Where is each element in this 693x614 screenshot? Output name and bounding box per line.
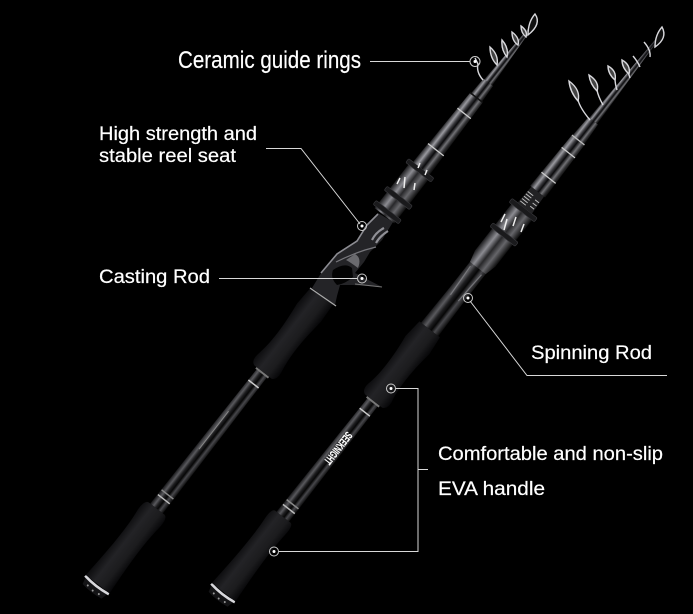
callout: reel seat: High strength and bbox=[99, 124, 257, 145]
callout: spinning rod: Spinning Rod bbox=[531, 343, 652, 364]
upper blank sections bbox=[413, 144, 444, 175]
spinning rod bbox=[205, 24, 674, 610]
fore EVA grip bbox=[362, 320, 442, 410]
butt cap bbox=[80, 576, 109, 601]
callout: ceramic guide rings: Ceramic guide rings bbox=[178, 47, 361, 74]
guides bbox=[569, 27, 664, 120]
lower blank bbox=[277, 396, 380, 522]
callout: casting rod: Casting Rod bbox=[99, 267, 210, 288]
callout: spinning rod bbox=[464, 294, 667, 376]
lower blank bbox=[150, 367, 269, 513]
rear EVA grip bbox=[212, 507, 295, 601]
logo: SEEKNIGHT bbox=[321, 429, 354, 467]
callout: EVA handle: Comfortable and non-slip bbox=[438, 444, 663, 465]
guides bbox=[475, 14, 537, 80]
callout: casting rod bbox=[99, 267, 366, 288]
callout: reel seat: stable reel seat bbox=[99, 146, 237, 167]
rear EVA grip bbox=[86, 499, 168, 593]
thread bbox=[518, 186, 545, 214]
butt cap bbox=[206, 584, 235, 609]
reel highlights bbox=[501, 214, 524, 232]
reel highlights bbox=[397, 163, 427, 190]
reel seat shaft bbox=[421, 255, 491, 336]
casting rod bbox=[80, 13, 547, 601]
reel tube bbox=[468, 200, 535, 276]
callout: EVA handle: EVA handle bbox=[438, 479, 545, 500]
fore EVA grip bbox=[251, 287, 334, 381]
reel tube bbox=[375, 162, 430, 223]
reel seat and trigger bbox=[310, 213, 393, 306]
callout: reel seat bbox=[99, 124, 366, 230]
upper blank sections bbox=[530, 135, 585, 198]
callout: EVA handle bbox=[270, 384, 663, 556]
